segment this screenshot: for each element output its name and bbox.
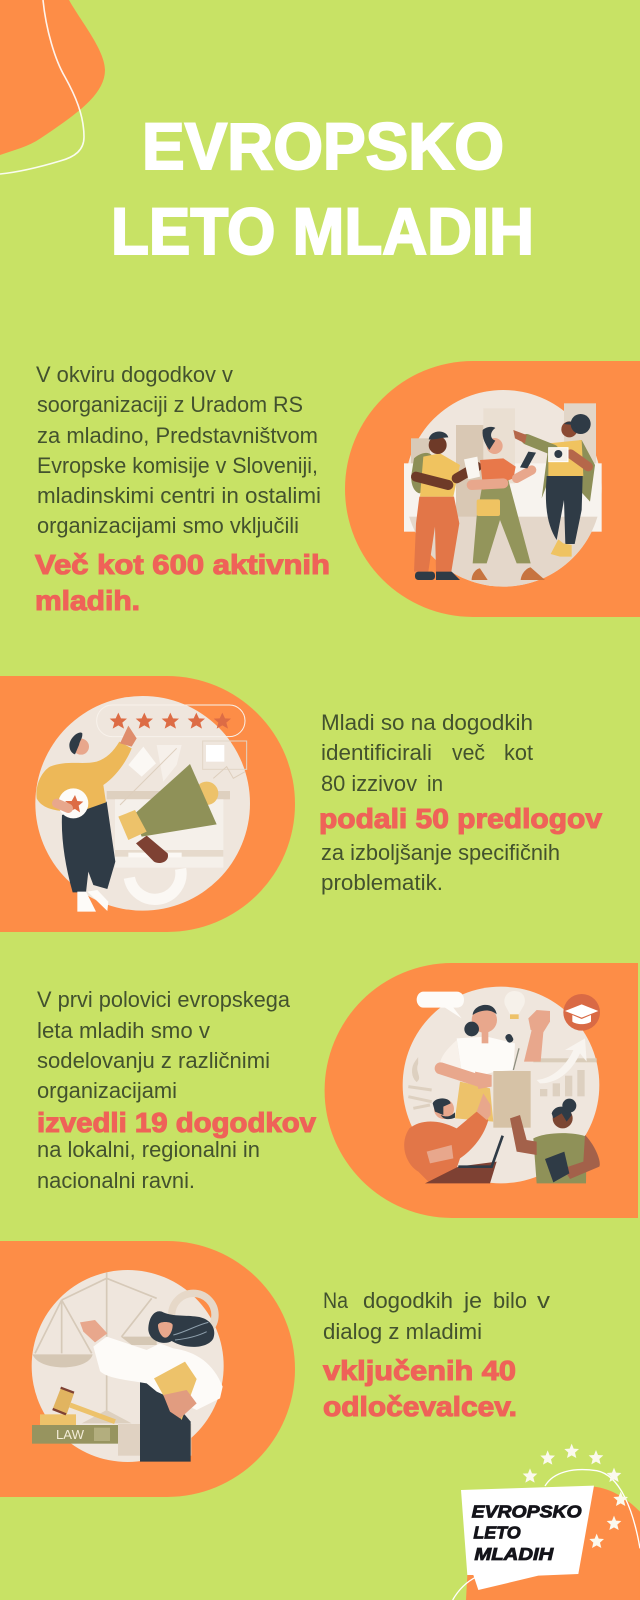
text block: 50 proposals: 80 izzivov: [321, 771, 417, 796]
icon: megaphone: [118, 764, 218, 863]
title: [111, 109, 534, 268]
text block: 50 proposals: [319, 710, 603, 895]
icon: gear: [125, 843, 185, 903]
text block: 40 decision makers: vključenih 40: [323, 1355, 516, 1386]
panel: law and decision makers: [0, 1241, 295, 1497]
text block: 19 events: izvedli 19 dogodkov: [37, 1107, 317, 1138]
text block: 600 active youth: mladinskimi centri in ostalimi: [37, 483, 321, 508]
text block: 19 events: na lokalni, regionalni in: [37, 1137, 260, 1162]
text block: 19 events: sodelovanju z različnimi: [37, 1048, 270, 1073]
icon: gavel on law book: [32, 1388, 118, 1444]
text block: 50 proposals: Mladi so na dogodkih: [321, 710, 533, 735]
logo stars: [523, 1444, 628, 1548]
logo text: EVROPSKO: [472, 1501, 582, 1521]
person: woman with camera: [513, 414, 595, 557]
decorative corner blob: [0, 0, 105, 174]
icon: scales: [35, 1272, 157, 1412]
person: speaker: [440, 1005, 550, 1128]
icon: gear: [172, 1293, 215, 1337]
text block: 50 proposals: več: [452, 740, 485, 765]
logo flag: [461, 1486, 594, 1590]
panel: young people group: [345, 361, 640, 617]
text block: 19 events: nacionalni ravni.: [37, 1168, 195, 1193]
text block: 40 decision makers: dialog z mladimi: [323, 1319, 482, 1344]
rating pill with stars: [97, 705, 245, 737]
icon: graduation cap badge: [563, 994, 600, 1031]
text block: 50 proposals: identificirali: [321, 740, 432, 765]
text block: 50 proposals: problematik.: [321, 870, 443, 895]
illustration: speaker with audience: [403, 987, 600, 1183]
text block: 600 active youth: za mladino, Predstavništvom: [37, 423, 318, 448]
text block: 40 decision makers: Na: [323, 1288, 349, 1313]
text block: 600 active youth: soorganizaciji z Uradom RS: [37, 392, 303, 417]
text block: 40 decision makers: odločevalcev.: [323, 1391, 517, 1422]
logo text: [472, 1501, 582, 1564]
text block: 600 active youth: organizacijami smo vključili: [37, 513, 299, 538]
text block: 50 proposals: in: [427, 771, 443, 796]
person: woman with clipboard: [510, 1099, 600, 1183]
title: LETO MLADIH: [111, 194, 534, 268]
text block: 19 events: organizacijami: [37, 1078, 177, 1103]
logo text: LETO: [473, 1522, 521, 1542]
text block: 600 active youth: Več kot 600 aktivnih: [35, 549, 330, 580]
logo text: MLADIH: [474, 1544, 554, 1564]
text block: 40 decision makers: je: [463, 1288, 482, 1313]
person: woman with tablet: [472, 427, 545, 580]
text block: 600 active youth: [35, 362, 330, 616]
panel: megaphone and rating: [0, 676, 295, 932]
logo: Evropsko leto mladih: [453, 1444, 640, 1600]
text block: 50 proposals: za izboljšanje specifičnih: [321, 840, 560, 865]
text block: 40 decision makers: bilo: [493, 1288, 527, 1313]
icon: gavel on law book: LAW: [56, 1427, 84, 1442]
person: bearded man with laptop: [404, 1093, 503, 1183]
icon: light bulb: [504, 991, 525, 1014]
text block: 40 decision makers: dogodkih: [363, 1288, 453, 1313]
person: woman with folder: [80, 1311, 223, 1462]
panel: speaker at a podium: [325, 963, 638, 1218]
illustration: three young people in a city: [404, 390, 602, 587]
icon: leaves: [128, 747, 156, 777]
text block: 40 decision makers: [323, 1288, 550, 1422]
person: man with backpack: [411, 432, 480, 580]
text block: 600 active youth: V okviru dogodkov v: [36, 362, 233, 387]
illustration: lawyer with scales: [32, 1270, 224, 1462]
text block: 600 active youth: Evropske komisije v Sloveniji,: [37, 453, 318, 478]
text block: 50 proposals: kot: [504, 740, 533, 765]
text block: 19 events: [37, 987, 317, 1193]
text block: 50 proposals: podali 50 predlogov: [319, 803, 603, 834]
person: man pointing: [36, 726, 137, 912]
title: EVROPSKO: [142, 109, 504, 183]
speech bubble: [417, 992, 464, 1018]
text block: 19 events: leta mladih smo v: [37, 1018, 210, 1043]
text block: 40 decision makers: v: [537, 1288, 550, 1313]
text block: 600 active youth: mladih.: [35, 585, 140, 616]
illustration: man with megaphone and star rating: [35, 696, 250, 912]
text block: 19 events: V prvi polovici evropskega: [37, 987, 291, 1012]
